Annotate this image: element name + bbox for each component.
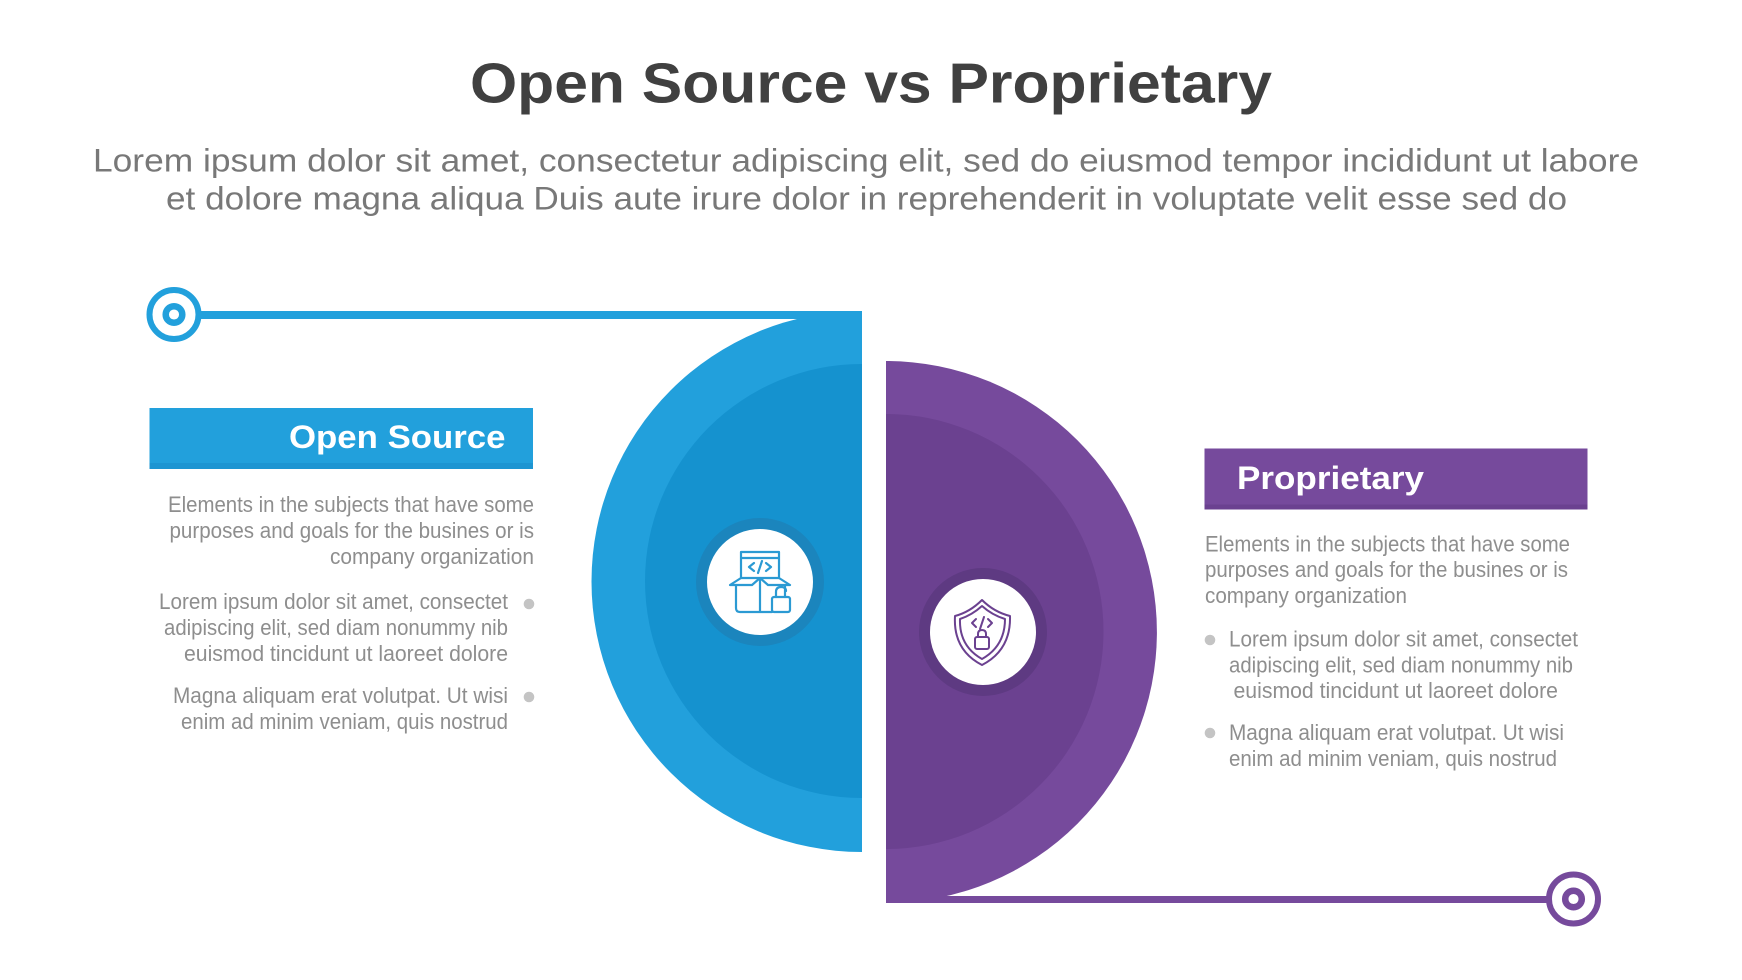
heading bar: proprietary: [1204, 448, 1588, 510]
subtitle: et dolore magna aliqua Duis aute irure dolor in reprehenderit in voluptate velit esse sed do: [166, 180, 1567, 216]
bullet: proprietary 1: Lorem ipsum dolor sit amet, consectet: [1229, 626, 1578, 652]
bullet: proprietary 1: euismod tincidunt ut laoreet dolore: [1234, 678, 1558, 703]
bullet: proprietary 2: [1205, 720, 1564, 771]
bullet: open source 1: Lorem ipsum dolor sit amet, consectet: [159, 589, 508, 614]
bullet: proprietary 1: adipiscing elit, sed diam nonummy nib: [1229, 652, 1573, 678]
description: proprietary: purposes and goals for the busines or is: [1205, 557, 1568, 582]
description: proprietary: [1205, 532, 1570, 608]
bullet: open source 1: [159, 589, 534, 666]
description: proprietary: Elements in the subjects that have some: [1205, 532, 1570, 556]
description: open source: [168, 492, 534, 569]
panel: open source half circle: [150, 290, 862, 852]
description: open source: purposes and goals for the busines or is: [170, 518, 534, 543]
target marker: open source: [150, 290, 198, 339]
panel: proprietary half circle: [886, 361, 1598, 924]
connector line: open source: [198, 311, 862, 319]
inner half circle: open source: [645, 364, 862, 798]
bullet: proprietary 2: Magna aliquam erat volutpat. Ut wisi: [1229, 720, 1564, 745]
subtitle: Lorem ipsum dolor sit amet, consectetur adipiscing elit, sed do eiusmod tempor incididunt ut labore: [93, 142, 1639, 178]
heading bar: open source: [150, 408, 533, 469]
description: open source: company organization: [330, 544, 534, 569]
bullet: open source 2: Magna aliquam erat volutpat. Ut wisi: [173, 683, 508, 708]
inner half circle: proprietary: [886, 414, 1104, 849]
heading bar: proprietary: Proprietary: [1237, 460, 1424, 496]
bullet: open source 1: euismod tincidunt ut laoreet dolore: [184, 641, 508, 666]
description: open source: Elements in the subjects that have some: [168, 492, 534, 517]
outer half circle: proprietary: [886, 361, 1157, 903]
panel: open source text: [150, 408, 534, 734]
bullet: open source 2: enim ad minim veniam, quis nostrud: [181, 709, 508, 734]
outer half circle: open source: [592, 311, 862, 852]
connector line: proprietary: [886, 896, 1556, 903]
heading bar: open source: Open Source: [289, 419, 506, 455]
icon badge: proprietary shield with code and lock: [919, 568, 1047, 696]
panel: proprietary text: [1204, 448, 1588, 771]
title: Open Source vs Proprietary: [470, 52, 1272, 116]
bullet: proprietary 1: [1205, 626, 1578, 703]
description: proprietary: company organization: [1205, 583, 1407, 608]
bullet: proprietary 2: enim ad minim veniam, quis nostrud: [1229, 746, 1557, 771]
icon badge: open source box with code and lock: [696, 518, 824, 646]
bullet: open source 1: adipiscing elit, sed diam nonummy nib: [164, 615, 508, 640]
subtitle: [93, 142, 1639, 216]
target marker: proprietary: [1549, 874, 1598, 924]
bullet: open source 2: [173, 683, 534, 734]
